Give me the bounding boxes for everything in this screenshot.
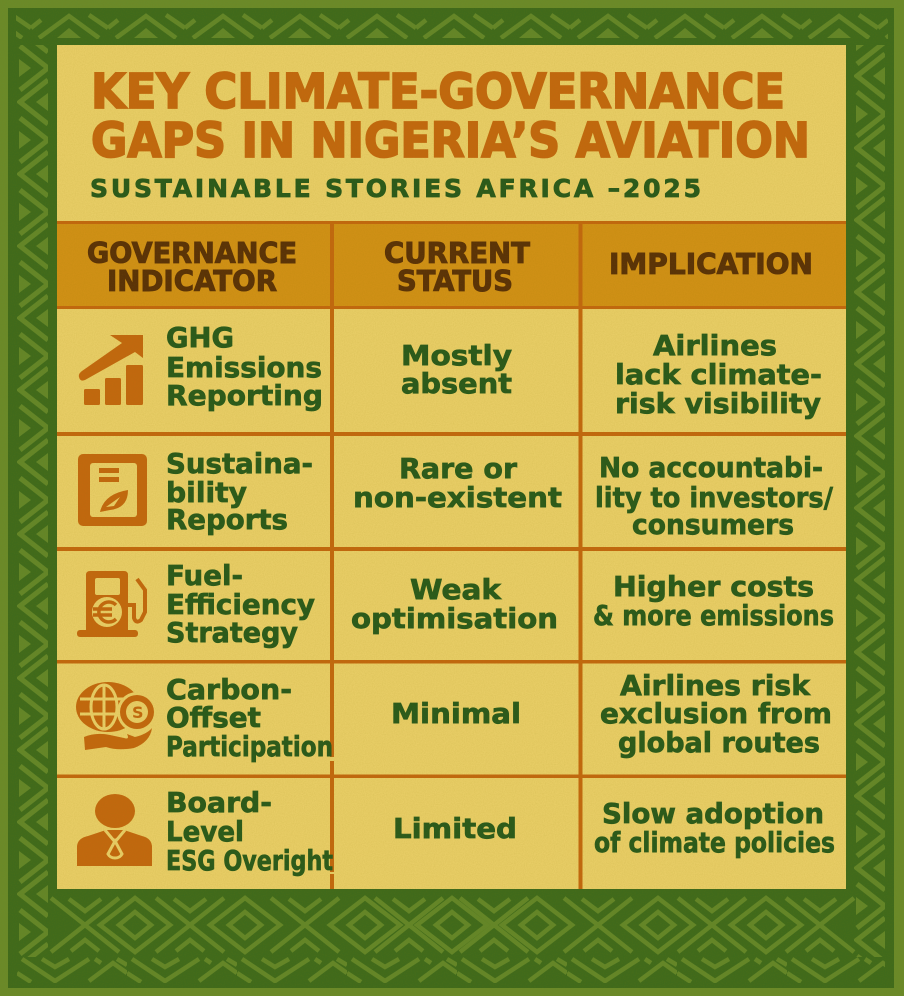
status: non-existent xyxy=(353,482,562,514)
implication: Slow adoption xyxy=(602,798,824,830)
icon: fuel pump with euro xyxy=(77,571,145,637)
implication: & more emissions xyxy=(593,600,834,632)
icon: report with leaf xyxy=(78,454,147,526)
header: current status xyxy=(384,237,531,298)
status: Weak xyxy=(410,574,502,606)
header: implication: IMPLICATION xyxy=(609,248,813,281)
implication: Higher costs xyxy=(613,571,814,603)
status: Mostly xyxy=(401,340,512,372)
indicator label: ESG Overight xyxy=(166,845,333,877)
icon: globe, coin and hand: S xyxy=(132,703,144,722)
indicator label xyxy=(166,787,333,877)
title: GAPS IN NIGERIA’S AVIATION xyxy=(91,113,810,169)
status: absent xyxy=(401,368,512,400)
title xyxy=(91,64,810,169)
header: governance indicator: GOVERNANCE xyxy=(87,237,297,270)
implication: lity to investors/ xyxy=(595,482,834,514)
implication xyxy=(600,670,832,759)
status xyxy=(401,340,512,400)
indicator label: Participation xyxy=(166,731,333,763)
header: governance indicator: INDICATOR xyxy=(107,265,277,298)
implication xyxy=(594,798,835,859)
implication: exclusion from xyxy=(600,698,832,730)
main panel xyxy=(57,45,846,889)
indicator label: Strategy xyxy=(166,617,298,649)
indicator label: Fuel- xyxy=(166,560,243,592)
implication xyxy=(615,330,822,420)
row 3: fuel-efficiency strategy xyxy=(77,560,834,649)
implication: risk visibility xyxy=(615,388,821,420)
table grid lines xyxy=(57,221,846,889)
indicator label: Offset xyxy=(166,702,261,734)
indicator label: Efficiency xyxy=(166,589,315,621)
status: Minimal xyxy=(391,698,521,730)
indicator label xyxy=(166,560,315,649)
status: Rare or xyxy=(399,453,517,485)
implication: consumers xyxy=(632,509,794,541)
indicator label: Level xyxy=(166,816,244,848)
indicator label: Reports xyxy=(166,504,288,536)
icon: globe, coin and hand xyxy=(76,682,157,750)
implication xyxy=(595,452,834,541)
icon: person with tie xyxy=(77,794,152,866)
indicator label xyxy=(166,322,323,412)
implication: Airlines risk xyxy=(620,670,811,702)
table header background xyxy=(57,223,846,307)
header: current status: CURRENT xyxy=(384,237,531,270)
implication: No accountabi- xyxy=(599,452,823,484)
implication: of climate policies xyxy=(594,827,835,859)
implication: Airlines xyxy=(653,330,777,362)
indicator label: Board- xyxy=(166,787,272,819)
status: optimisation xyxy=(351,603,558,635)
indicator label xyxy=(166,448,313,536)
title: KEY CLIMATE-GOVERNANCE xyxy=(91,64,785,120)
row 5: board-level ESG oversight xyxy=(77,787,835,877)
header: governance indicator xyxy=(87,237,297,298)
indicator label: Reporting xyxy=(166,380,323,412)
icon: rising bar chart xyxy=(79,335,143,405)
row 2: sustainability reports xyxy=(78,448,834,541)
indicator label: Emissions xyxy=(166,352,322,384)
indicator label: GHG xyxy=(166,322,234,354)
indicator label: Carbon- xyxy=(166,674,292,706)
indicator label: Sustaina- xyxy=(166,448,313,480)
status xyxy=(351,574,558,635)
implication xyxy=(593,571,834,632)
indicator label xyxy=(166,674,333,763)
row 4: carbon-offset participation xyxy=(76,670,832,763)
header: current status: STATUS xyxy=(397,265,513,298)
subtitle: SUSTAINABLE STORIES AFRICA –2025 xyxy=(90,174,701,203)
status xyxy=(353,453,562,514)
status: Limited xyxy=(393,813,517,845)
implication: lack climate- xyxy=(615,359,822,391)
implication: global routes xyxy=(618,727,820,759)
indicator label: bility xyxy=(166,477,247,509)
row 1: GHG emissions reporting xyxy=(79,322,822,420)
